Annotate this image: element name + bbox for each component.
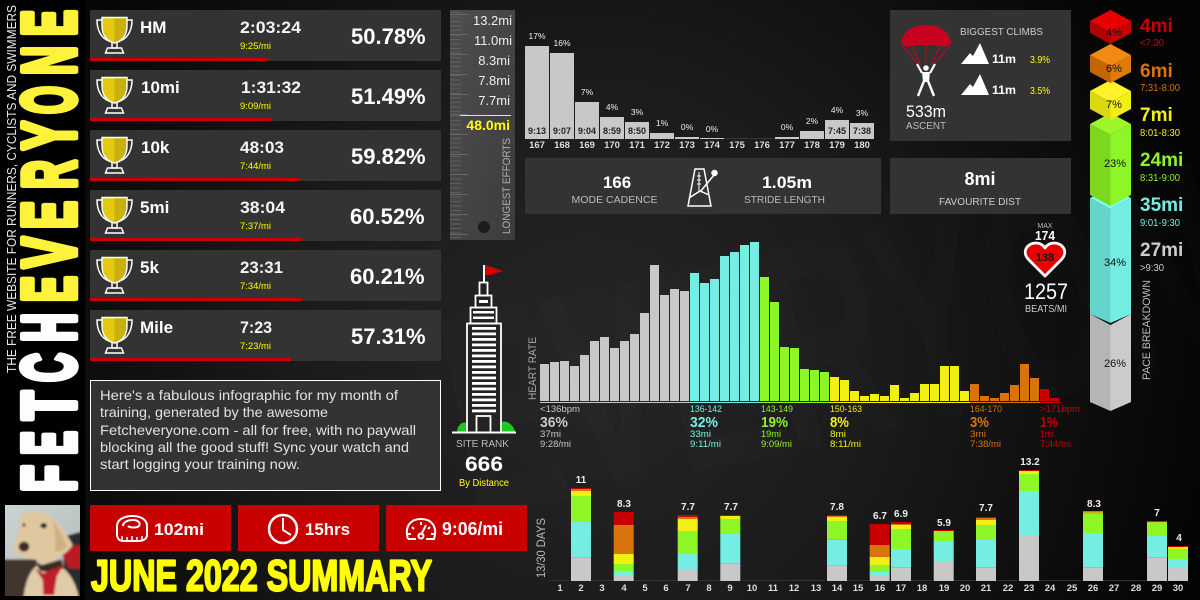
chart: daily distance stacked bars: 8.3 [617,499,631,510]
panel: personal best 10k: 59.82% [351,144,426,169]
legend: pace bands: 8:01-8:30 [1140,128,1180,139]
logo: fetcheveryone: E [7,276,91,302]
chart: cadence histogram: 0% [781,122,794,132]
legend: heart rate over 171: 1% [1040,414,1058,431]
panel: ascent and climbs: 3.5% [1030,86,1050,97]
panel: ascent and climbs [890,10,1071,141]
panel: longest efforts ruler: 11.0mi [474,33,512,48]
chart: cadence histogram: 9:04 [578,126,596,136]
chart: pace breakdown stacked blocks: 6% [1106,63,1122,75]
panel: personal best Mile: 57.31% [351,324,426,349]
legend: heart rate over 171: 1mi [1040,429,1054,439]
chart: heart rate histogram [527,242,1061,403]
panel: personal best 10k: 48:03 [240,138,284,157]
chart: cadence histogram: 3% [856,108,869,118]
chart: cadence histogram: 16% [553,38,571,48]
legend: pace bands: 35mi [1140,195,1183,216]
legend: heart rate 150-163: 150-163 [830,404,862,414]
chart: daily distance stacked bars: 22 [1003,583,1013,594]
logo: fetcheveryone: E [7,431,91,455]
legend: pace bands [1140,16,1183,380]
panel: personal best 10k: 10k [141,138,170,157]
chart: daily distance stacked bars: 19 [939,583,949,594]
icon: clock [269,515,297,543]
legend: pace bands: 9:01-9:30 [1140,218,1180,229]
panel: favourite distance: FAVOURITE DIST [939,196,1022,208]
chart: daily distance stacked bars: 25 [1067,583,1078,594]
chart: cadence histogram: 175 [729,140,746,151]
legend: heart rate 136-142: 9:11/mi [690,439,721,449]
chart: daily distance stacked bars: 6 [663,583,669,594]
chart: cadence histogram: 17% [528,31,546,41]
panel: cadence and stride [525,158,881,214]
stat: pace [386,505,527,551]
text block: intro [90,380,440,490]
panel: personal best 5mi: 5mi [140,198,169,217]
panel: personal best 5mi: 60.52% [350,204,425,229]
panel: longest efforts ruler: 7.8mi [478,73,510,88]
panel: personal best HM: 50.78% [351,24,426,49]
chart: cadence histogram: 179 [829,140,845,151]
panel: personal best 5k [90,250,441,301]
chart: daily distance stacked bars: 18 [917,583,927,594]
logo: fetcheveryone: R [7,160,91,189]
bar: day 30 [1168,546,1188,581]
panel: personal best 10k [90,130,441,181]
chart: cadence histogram: 8:50 [628,126,646,136]
chart: daily distance stacked bars: 11 [576,475,587,486]
chart: cadence histogram: 167 [529,140,545,151]
chart: cadence histogram: 173 [679,140,695,151]
logo: fetcheveryone: Y [7,121,91,150]
chart: cadence histogram: 169 [579,140,595,151]
legend: heart rate under 136 [540,404,580,449]
chart: daily distance stacked bars: 1 [557,583,563,594]
legend: pace bands: 27mi [1140,240,1183,261]
panel: ascent and climbs: 533m [906,102,946,121]
chart: cadence histogram: 2% [806,116,819,126]
chart: daily distance stacked bars: 4 [621,583,627,594]
chart: cadence histogram: 172 [654,140,670,151]
chart: cadence histogram: 9:07 [553,126,571,136]
panel: longest efforts ruler: 48.0mi [466,117,510,133]
legend: heart rate 143-149 [761,404,793,449]
legend: heart rate over 171 [1040,404,1080,449]
panel: personal best 5mi [90,190,441,241]
chart: pace breakdown stacked blocks: 26% [1104,358,1126,370]
chart: pace breakdown stacked blocks: 23% [1104,158,1126,170]
panel: personal best HM [90,10,441,61]
icon: mountain [961,43,989,64]
chart: daily distance stacked bars: 16 [875,583,885,594]
stat: time [238,505,379,551]
icon: mountain [961,74,989,95]
logo: fetcheveryone: V [7,237,91,268]
icon: heart rate: BEATS/MI [1025,304,1067,315]
legend: heart rate 150-163: 8% [830,414,849,431]
bar: day 16 [870,524,890,581]
chart: daily distance stacked bars: 24 [1045,583,1056,594]
bar: day 4 [614,512,634,581]
chart: cadence histogram: 7:38 [853,126,871,136]
panel: personal best 5k: 60.21% [350,264,425,289]
icon: heart rate: 138 [1036,252,1054,264]
logo: fetcheveryone: F [7,465,91,492]
chart: heart rate histogram: HEART RATE [527,337,539,400]
logo: fetcheveryone: H [7,313,91,342]
bar: day 14 [827,515,847,581]
chart: cadence histogram: 0% [706,124,719,134]
chart: daily distance stacked bars: 23 [1024,583,1034,594]
legend: heart rate 136-142: 33mi [690,429,711,439]
panel: favourite distance: 8mi [964,169,996,189]
text block: intro: Here's a fabulous infographic for my month of [100,387,398,403]
bar: day 2 [571,488,591,581]
chart: cadence histogram: 168 [554,140,570,151]
panel: ascent and climbs: 11m [992,52,1016,66]
panel: longest efforts ruler [450,10,515,240]
legend: heart rate 136-142: 32% [690,414,718,431]
text: site rank: SITE RANK [456,438,509,450]
chart: daily distance stacked bars: 28 [1131,583,1141,594]
chart: cadence histogram: 9:13 [528,126,546,136]
logo: fetcheveryone: O [7,86,91,114]
panel: favourite distance [890,158,1071,214]
panel: longest efforts ruler: 7.7mi [478,93,510,108]
chart: cadence histogram: 0% [681,122,694,132]
panel: ascent and climbs: 11m [992,83,1016,97]
panel: longest efforts ruler: 8.3mi [478,53,510,68]
chart: cadence histogram: 7% [581,87,594,97]
panel: ascent and climbs: BIGGEST CLIMBS [960,26,1043,38]
chart: cadence histogram: 4% [606,102,619,112]
panel: cadence and stride: MODE CADENCE [572,194,658,206]
panel: personal best Mile: 7:23 [240,318,272,337]
logo: fetcheveryone [7,10,91,492]
chart: cadence histogram: 1% [656,118,669,128]
chart: cadence histogram: 170 [604,140,620,151]
legend: heart rate 143-149: 19% [761,414,788,431]
legend: pace bands: PACE BREAKDOWN [1141,280,1153,380]
bar: day 7 [678,515,698,581]
chart: cadence histogram: 7:45 [828,126,846,136]
chart: daily distance stacked bars: 5.9 [937,518,951,529]
icon: heart rate: 174 [1035,228,1056,243]
stat: distance [90,505,231,551]
title: JUNE 2022 SUMMARY [91,552,432,600]
panel: personal best Mile: Mile [140,318,173,337]
panel: personal best HM: 2:03:24 [240,18,302,37]
chart: daily distance stacked bars: 7.8 [830,502,844,513]
chart: daily distance stacked bars: 21 [981,583,992,594]
text: site rank: 666 [465,453,503,476]
legend: pace bands: 7:31-8:00 [1140,83,1180,94]
chart: daily distance stacked bars: 2 [578,583,584,594]
panel: personal best Mile: 7:23/mi [240,341,271,352]
chart: daily distance stacked bars: 13.2 [1020,457,1040,468]
panel: ascent and climbs: 3.9% [1030,55,1050,66]
panel: cadence and stride: 166 [603,173,631,192]
chart: daily distance stacked bars: 6.7 [873,511,887,522]
chart: daily distance stacked bars: 27 [1109,583,1119,594]
stat: distance: 102mi [154,520,204,539]
panel: personal best 10k: 7:44/mi [240,161,271,172]
chart: daily distance stacked bars: 14 [832,583,843,594]
chart: daily distance stacked bars: 15 [853,583,864,594]
text block: intro: start logging your training now. [100,456,300,472]
chart: daily distance stacked bars: 5 [642,583,648,594]
photo: dog [5,505,80,596]
chart: pace breakdown stacked blocks [1090,10,1131,411]
panel: personal best Mile [90,310,441,361]
bar: day 23 [1019,470,1039,581]
panel: personal best 5k: 23:31 [240,258,283,277]
chart: daily distance stacked bars: 7.7 [724,502,738,513]
chart: cadence histogram: 176 [754,140,770,151]
logo: fetcheveryone: N [7,46,91,75]
panel: personal best HM: 9:25/mi [240,41,271,52]
chart: daily distance stacked bars: 7 [685,583,691,594]
chart: daily distance stacked bars: 17 [896,583,906,594]
chart: cadence histogram: 177 [779,140,795,151]
chart: cadence histogram: 180 [854,140,870,151]
bar: day 29 [1147,521,1167,581]
icon: metronome [688,169,717,206]
chart: pace breakdown stacked blocks: 34% [1104,257,1126,269]
chart: daily distance stacked bars: 7.7 [681,502,695,513]
chart: daily distance stacked bars: 29 [1152,583,1162,594]
chart: daily distance stacked bars: 13 [811,583,821,594]
chart: daily distance stacked bars: 3 [599,583,605,594]
text block: intro: Fetcheveryone.com - all for free, with no paywall [100,422,416,438]
panel: cadence and stride: STRIDE LENGTH [744,194,825,206]
bar: day 17 [891,522,911,581]
chart: daily distance stacked bars: 7 [1154,508,1160,519]
chart: daily distance stacked bars [534,457,1188,594]
chart: daily distance stacked bars: 13/30 DAYS [534,518,548,578]
text: site rank: By Distance [459,478,509,489]
logo: fetcheveryone: T [7,391,91,420]
chart: cadence histogram: 171 [629,140,646,151]
legend: heart rate 150-163: 8mi [830,429,846,439]
panel: longest efforts ruler: 13.2mi [473,13,512,28]
logo: fetcheveryone: E [7,201,91,229]
chart: daily distance stacked bars: 30 [1173,583,1183,594]
panel: personal best 5mi: 7:37/mi [240,221,271,232]
legend: heart rate 164-170: 164-170 [970,404,1002,414]
legend: heart rate under 136: <136bpm [540,404,580,414]
legend: pace bands: <7:30 [1140,38,1164,49]
panel: personal best 10mi: 10mi [141,78,180,97]
panel: personal best 10mi: 1:31:32 [241,78,301,97]
chart: daily distance stacked bars: 12 [789,583,799,594]
legend: heart rate 143-149: 19mi [761,429,781,439]
legend: heart rate 136-142 [690,404,722,449]
chart: cadence histogram: 178 [804,140,820,151]
chart: daily distance stacked bars: 26 [1088,583,1098,594]
legend: heart rate 164-170: 3% [970,414,989,431]
panel: longest efforts ruler: LONGEST EFFORTS [501,138,513,234]
chart: pace breakdown stacked blocks: 7% [1106,99,1122,111]
chart: daily distance stacked bars: 20 [960,583,970,594]
text block: intro: training, generated by the awesome [100,404,328,420]
chart: daily distance stacked bars: 8 [706,583,712,594]
legend: heart rate 136-142: 136-142 [690,404,722,414]
legend: heart rate over 171: 7:44/mi [1040,439,1071,449]
legend: pace bands: 24mi [1140,150,1183,171]
logo: fetcheveryone: C [7,353,91,382]
panel: personal best HM: HM [140,18,166,37]
legend: heart rate 164-170: 3mi [970,429,986,439]
legend: pace bands: 7mi [1140,105,1173,126]
chart: cadence histogram: 8:59 [603,126,621,136]
chart: pace breakdown stacked blocks: 4% [1106,27,1122,39]
icon: heart rate [1024,223,1068,315]
legend: heart rate 164-170: 7:38/mi [970,439,1001,449]
legend: heart rate over 171: >171bpm [1040,404,1080,414]
icon: heart rate: MAX [1037,223,1053,230]
legend: heart rate 164-170 [970,404,1002,449]
panel: personal best 10mi: 51.49% [351,84,426,109]
text: site rank [456,438,509,489]
bar: day 19 [934,530,954,581]
icon: tape measure [117,516,147,541]
legend: heart rate under 136: 37mi [540,429,561,439]
bar: day 26 [1083,511,1103,581]
text block: intro: blocking all the good stuff! Sync your watch and [100,439,409,455]
panel: personal best 5k: 5k [140,258,159,277]
legend: heart rate under 136: 36% [540,414,568,431]
chart: cadence histogram: 3% [631,107,644,117]
legend: heart rate 143-149: 143-149 [761,404,793,414]
bar: day 9 [720,515,740,581]
icon: skyscraper site rank [452,265,516,434]
legend: heart rate 150-163 [830,404,862,449]
legend: pace bands: 6mi [1140,61,1173,82]
chart: daily distance stacked bars: 10 [747,583,757,594]
chart: cadence histogram [525,31,874,151]
stat: pace: 9:06/mi [442,519,503,539]
icon: parachute [901,25,951,96]
legend: pace bands: >9:30 [1140,263,1164,274]
icon: speedometer [407,519,435,539]
chart: daily distance stacked bars: 4 [1176,533,1182,544]
panel: personal best 5mi: 38:04 [240,198,286,217]
chart: daily distance stacked bars: 9 [727,583,733,594]
chart: cadence histogram: 174 [704,140,721,151]
icon: heart rate: 1257 [1024,279,1068,304]
chart: daily distance stacked bars: 8.3 [1087,499,1101,510]
panel: personal best 10mi [90,70,441,121]
stat: time: 15hrs [305,520,350,539]
chart: cadence histogram: 4% [831,105,844,115]
bar: day 21 [976,517,996,581]
chart: daily distance stacked bars: 7.7 [979,503,993,514]
panel: cadence and stride: 1.05m [762,173,812,192]
chart: daily distance stacked bars: 11 [768,583,779,594]
panel: ascent and climbs: ASCENT [906,120,947,132]
legend: pace bands: 4mi [1140,16,1173,37]
legend: heart rate 143-149: 9:09/mi [761,439,792,449]
panel: personal best 5k: 7:34/mi [240,281,271,292]
legend: heart rate under 136: 9:28/mi [540,439,571,449]
chart: daily distance stacked bars: 6.9 [894,509,908,520]
panel: personal best 10mi: 9:09/mi [240,101,271,112]
legend: heart rate 150-163: 8:11/mi [830,439,861,449]
legend: pace bands: 8:31-9:00 [1140,173,1180,184]
